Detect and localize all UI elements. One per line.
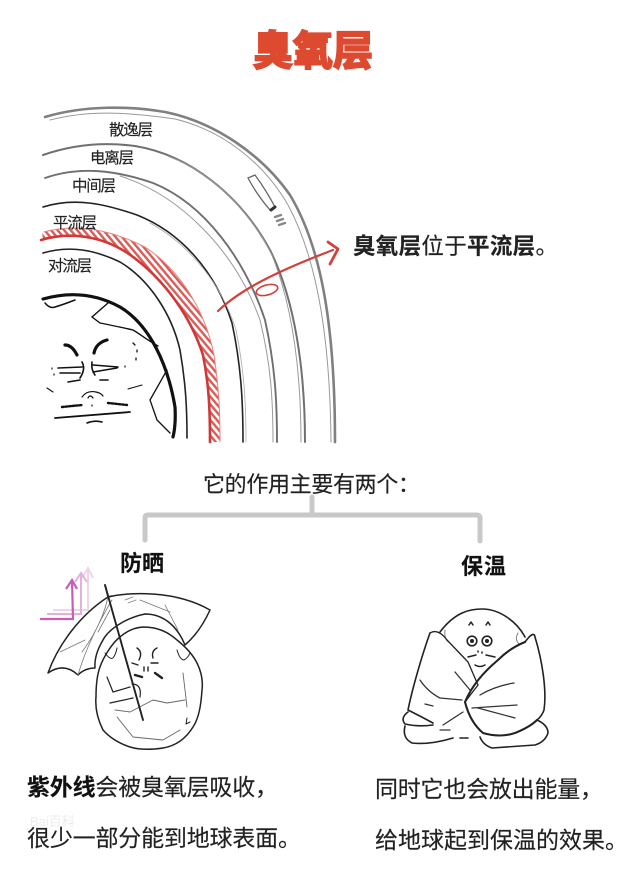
watermark: Bai百科: [30, 814, 75, 829]
caption: heat release: 同时它也会放出能量，: [375, 776, 603, 802]
earth body: [96, 627, 202, 749]
label: exosphere: 散逸层: [109, 121, 153, 139]
caption: heat release: 给地球起到保温的效果。: [375, 827, 625, 853]
diagram: atmosphere layers: [41, 108, 338, 442]
umbrella handle: [105, 585, 143, 720]
caption: UV absorbed: 很少一部分能到地球表面。: [27, 825, 301, 851]
heading: insulation: 保温: [461, 554, 506, 579]
bracket connector: [145, 497, 480, 541]
heading: sun protection: 防晒: [120, 551, 164, 576]
label: mesosphere: 中间层: [72, 177, 116, 195]
icon: satellite: [248, 175, 285, 225]
label: ionosphere: 电离层: [90, 149, 134, 167]
callout: ozone in stratosphere: 臭氧层位于平流层。: [353, 234, 558, 259]
ozone band: red hatched: [41, 228, 220, 442]
layer line: ionosphere: [43, 144, 305, 442]
layer line: stratopause: [43, 202, 246, 442]
label: troposphere: 对流层: [48, 257, 92, 275]
earth outline: [43, 295, 175, 437]
caption: UV absorbed: [27, 774, 301, 851]
blanket figure face: [467, 622, 495, 666]
earth face: [47, 340, 142, 423]
subheading: two functions: 它的作用主要有两个：: [203, 472, 420, 497]
umbrella: [48, 585, 210, 675]
icon: uv arrows: [40, 568, 93, 619]
layer line: exosphere: [45, 108, 335, 442]
caption: heat release: [375, 776, 625, 853]
layer line: mesosphere: [45, 171, 277, 442]
illustration: earth wrapped in blanket: [403, 609, 548, 748]
arrow: to ozone label: [218, 242, 338, 311]
caption: UV absorbed: 紫外线会被臭氧层吸收，: [27, 774, 278, 800]
layer line: troposphere: [43, 249, 187, 438]
title: 臭氧层: [253, 28, 373, 74]
label: stratosphere: 平流层: [53, 214, 97, 232]
illustration: earth with umbrella: [48, 585, 210, 749]
layer labels: [48, 121, 153, 275]
